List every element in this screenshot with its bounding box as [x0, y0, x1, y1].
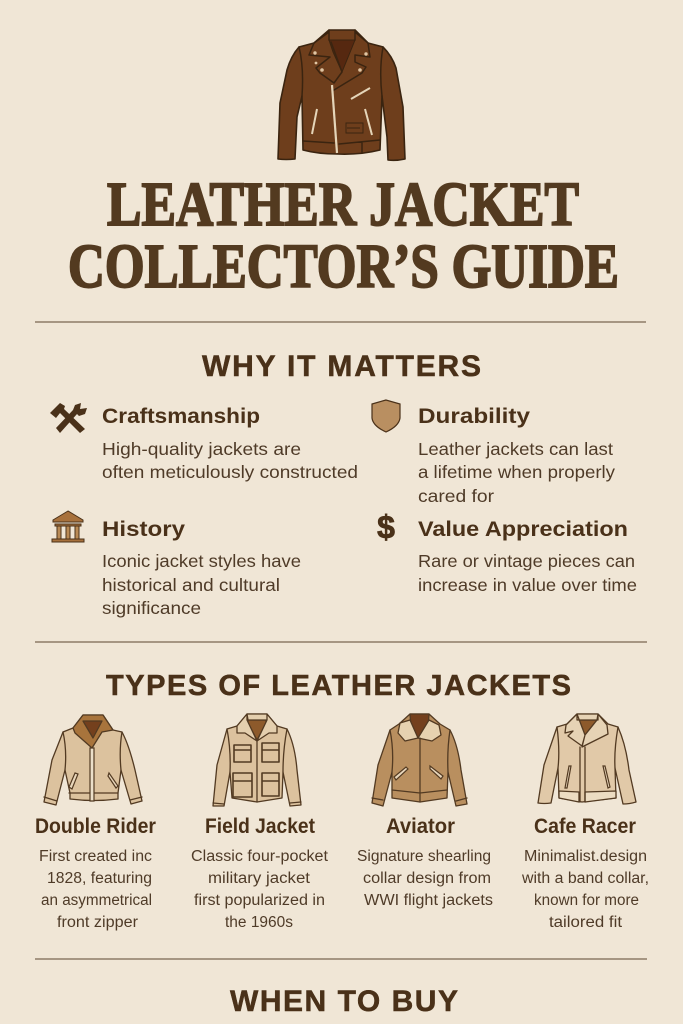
- item: craftsmanship: Craftsmanship: [102, 405, 260, 428]
- item: durability: a lifetime when properly: [418, 462, 615, 482]
- item: craftsmanship: [50, 403, 358, 482]
- description: field jacket: military jacket: [208, 870, 311, 887]
- icon: columned building: [52, 511, 84, 542]
- heading: why it matters: WHY IT MATTERS: [202, 350, 481, 383]
- description: cafe racer: tailored fit: [549, 914, 623, 931]
- description: field jacket: [191, 848, 329, 931]
- description: double rider: [39, 848, 152, 931]
- icon: shield: [372, 400, 400, 432]
- item: history: [52, 511, 301, 618]
- hero illustration: brown leather biker jacket: [278, 30, 405, 160]
- description: cafe racer: [521, 848, 649, 931]
- icon: dollar sign: $: [377, 509, 395, 545]
- item: durability: Durability: [418, 405, 530, 428]
- description: field jacket: first popularized in: [194, 892, 325, 909]
- heading: types of leather jackets: TYPES OF LEATHER JACKETS: [106, 670, 571, 702]
- description: aviator: WWI flight jackets: [364, 892, 493, 909]
- label: aviator: Aviator: [386, 815, 455, 838]
- description: double rider: 1828, featuring: [47, 870, 152, 887]
- description: cafe racer: with a band collar,: [521, 870, 649, 887]
- item: history: historical and cultural: [102, 575, 280, 595]
- description: aviator: collar design from: [363, 870, 491, 887]
- jacket type: field jacket: [191, 714, 329, 931]
- item: value appreciation: Rare or vintage pieces can: [418, 551, 635, 571]
- description: aviator: Signature shearling: [357, 848, 491, 865]
- item: history: Iconic jacket styles have: [102, 551, 301, 571]
- label: field jacket: Field Jacket: [205, 815, 315, 838]
- item: value appreciation: [377, 509, 637, 595]
- label: double rider: Double Rider: [35, 815, 156, 838]
- jacket type: aviator: [357, 714, 493, 909]
- description: cafe racer: known for more: [534, 892, 639, 909]
- jacket type: cafe racer: [521, 714, 649, 931]
- illustration: aviator jacket: [372, 714, 467, 806]
- illustration: field jacket: [213, 714, 301, 806]
- item: value appreciation: Value Appreciation: [418, 518, 628, 541]
- item: craftsmanship: High-quality jackets are: [102, 439, 301, 459]
- item: value appreciation: increase in value over time: [418, 575, 637, 595]
- title: COLLECTOR’S GUIDE: [68, 231, 619, 301]
- title: LEATHER JACKET: [107, 169, 579, 239]
- description: double rider: First created inc: [39, 848, 152, 865]
- illustration: cafe racer jacket: [538, 714, 636, 804]
- item: durability: Leather jackets can last: [418, 439, 613, 459]
- item: durability: cared for: [418, 486, 494, 506]
- illustration: double rider jacket: [44, 715, 142, 805]
- heading: when to buy: WHEN TO BUY: [230, 985, 458, 1018]
- item: history: significance: [102, 598, 201, 618]
- label: cafe racer: Cafe Racer: [534, 815, 636, 838]
- description: aviator: [357, 848, 493, 909]
- description: field jacket: Classic four-pocket: [191, 848, 329, 865]
- icon: hammer and wrench: [50, 403, 87, 433]
- description: cafe racer: Minimalist.design: [524, 848, 647, 865]
- description: double rider: front zipper: [57, 914, 138, 931]
- item: craftsmanship: often meticulously constructed: [102, 462, 358, 482]
- item: history: History: [102, 518, 185, 541]
- jacket type: double rider: [35, 715, 156, 931]
- description: field jacket: the 1960s: [225, 914, 293, 931]
- description: double rider: an asymmetrical: [41, 892, 152, 909]
- item: durability: [372, 400, 615, 506]
- title: [68, 169, 619, 301]
